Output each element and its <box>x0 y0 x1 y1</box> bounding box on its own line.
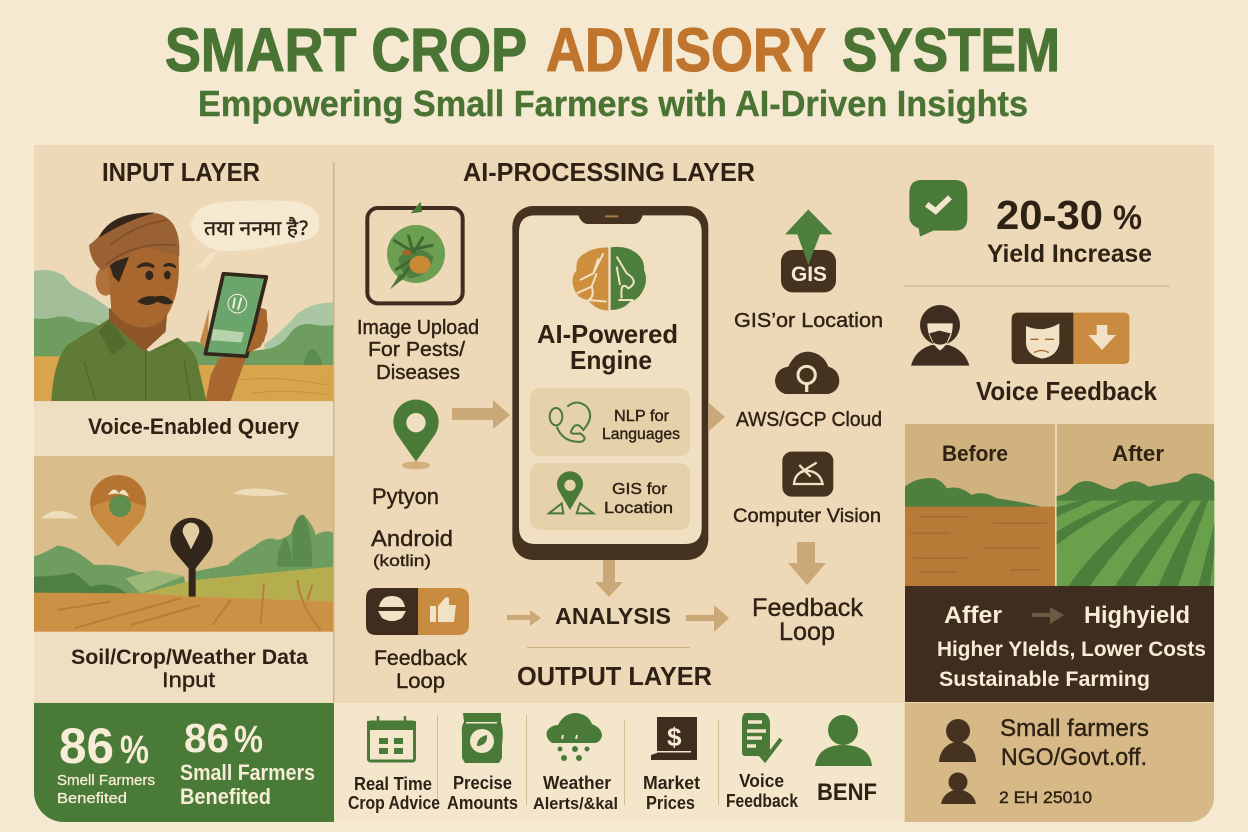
speech bubble <box>191 200 319 251</box>
label: python: Pytyon <box>372 484 439 509</box>
label: feedback loop right: Loop <box>779 618 835 646</box>
arrow: right toward engine <box>452 400 510 429</box>
icon: GIS <box>781 209 836 292</box>
label: image upload: Diseases <box>376 362 460 384</box>
card: NLP: NLP for <box>614 408 670 425</box>
label: computer vision: Computer Vision <box>733 506 881 527</box>
output: precise amounts: Amounts <box>447 793 518 813</box>
output: real time crop advice: Real Time <box>354 774 432 794</box>
stat left: % <box>120 728 149 772</box>
phone: AI-powered engine <box>512 206 708 560</box>
shirt <box>51 319 206 401</box>
label: feedback loop right <box>752 594 863 646</box>
stat right: Benefited <box>180 784 271 809</box>
output: weather alerts: Alerts/&kal <box>533 794 618 813</box>
output: market prices <box>643 717 700 813</box>
icon: cloud <box>775 352 839 394</box>
subtitle: Empowering Small Farmers with AI-Driven Insights <box>198 83 1028 124</box>
label: analysis: ANALYSIS <box>555 603 671 629</box>
card: NLP: Languages <box>602 426 680 443</box>
title: ADVISORY <box>546 16 826 84</box>
stat right: % <box>234 719 263 761</box>
panel: results: Affer <box>944 602 1002 629</box>
panel: results <box>905 586 1214 702</box>
icon: person two <box>941 772 976 804</box>
title <box>165 16 1060 84</box>
label: soil crop weather input: Soil/Crop/Weather Data <box>71 646 308 669</box>
output: voice feedback: Voice <box>739 771 784 791</box>
output: beneficiaries <box>815 715 877 806</box>
stat left: Smell Farmers <box>57 772 155 789</box>
label: small farmers: Small farmers <box>1000 715 1149 742</box>
output: real time crop advice: Crop Advice <box>348 793 440 813</box>
card: GIS: Location <box>604 500 673 517</box>
main panel background <box>34 145 1214 822</box>
icon: face and down arrow <box>1012 313 1129 364</box>
label: image upload <box>357 317 479 384</box>
arrow: after to high yield <box>1032 607 1064 624</box>
label: image upload: For Pests/ <box>368 339 465 361</box>
band: voice query <box>34 402 334 456</box>
label: feedback loop left: Feedback <box>374 647 467 670</box>
output: real time crop advice <box>348 716 440 813</box>
stat: yield increase: Yield Increase <box>987 240 1152 268</box>
title: SMART CROP <box>165 16 527 84</box>
face and neck <box>109 308 167 352</box>
label: GIS location: GIS’or Location <box>734 310 883 332</box>
panel: results: Sustainable Farming <box>939 668 1150 691</box>
panel: impact column <box>904 180 1214 822</box>
panel: results: Highyield <box>1084 602 1190 629</box>
label: feedback loop left <box>374 647 467 693</box>
speech bubble text: तया ननमा है? <box>204 215 309 244</box>
label: NGO govt: NGO/Govt.off. <box>1001 744 1147 771</box>
stat left: Benefited <box>57 790 127 807</box>
illustration: field with map pins <box>34 456 334 632</box>
card: GIS <box>530 463 690 530</box>
dark pin <box>170 518 213 597</box>
icon: computer vision <box>782 452 833 497</box>
output: precise amounts <box>447 713 518 813</box>
icon: person with mask <box>911 305 969 366</box>
label: soil crop weather input: Input <box>162 669 215 692</box>
stat right: 86 <box>184 715 229 761</box>
arrow: down to analysis <box>595 560 623 597</box>
stat: yield increase <box>987 192 1152 268</box>
output: weather alerts <box>533 713 618 813</box>
label: AI-powered engine: AI-Powered <box>537 319 678 349</box>
hand and arm <box>206 308 267 401</box>
label: AI-powered engine <box>537 319 678 375</box>
arrow: to analysis <box>507 610 541 626</box>
arrow: down to feedback <box>788 542 826 585</box>
icon text: GIS: GIS <box>791 263 827 286</box>
output: weather alerts: Weather <box>543 773 611 793</box>
icon: check speech bubble <box>909 180 967 237</box>
card: NLP <box>530 388 690 456</box>
output: market prices: $ <box>667 722 682 752</box>
output: voice feedback: Feedback <box>726 791 799 811</box>
illustration: farmer with phone <box>34 200 334 401</box>
label: cloud: AWS/GCP Cloud <box>736 409 882 431</box>
panel: before <box>905 424 1055 586</box>
label: code: 2 EH 25010 <box>999 788 1092 807</box>
heading: output layer: OUTPUT LAYER <box>517 661 712 691</box>
label: voice feedback: Voice Feedback <box>976 376 1157 406</box>
panel: input layer <box>34 157 334 822</box>
output: market prices: Prices <box>646 793 695 813</box>
label: android kotlin <box>371 526 453 570</box>
heading: AI processing layer: AI-PROCESSING LAYER <box>463 157 755 187</box>
icon: feedback thumbs up <box>366 588 469 635</box>
label: soil crop weather input <box>71 646 308 692</box>
output: market prices: Market <box>643 773 700 793</box>
orange pin <box>90 475 146 547</box>
band: soil crop weather <box>34 632 334 702</box>
label: feedback loop left: Loop <box>396 670 445 693</box>
label: android kotlin: Android <box>371 526 453 551</box>
stat left <box>57 718 155 807</box>
arrow: analysis to feedback <box>686 605 729 632</box>
icon: location pin <box>393 399 439 469</box>
panel: AI processing layer <box>357 157 883 693</box>
panel: beneficiaries <box>905 703 1214 822</box>
phone <box>205 274 266 356</box>
label: AI-powered engine: Engine <box>570 345 652 375</box>
stat left: 86 <box>59 718 114 774</box>
label: image upload: Image Upload <box>357 317 479 339</box>
icon: brain <box>572 247 646 311</box>
panel: results: Higher YIelds, Lower Costs <box>937 638 1206 661</box>
heading: input layer: INPUT LAYER <box>102 157 260 187</box>
label: feedback loop right: Feedback <box>752 594 863 622</box>
icon: image upload pest <box>367 202 463 303</box>
stat: yield increase: 20-30 <box>996 192 1103 238</box>
output: beneficiaries: BENF <box>817 779 877 806</box>
panel: before: Before <box>942 441 1008 466</box>
stat: yield increase: % <box>1113 199 1142 237</box>
label: voice query: Voice-Enabled Query <box>88 414 300 439</box>
stat right <box>180 715 315 809</box>
title: SYSTEM <box>842 16 1060 84</box>
card: GIS: GIS for <box>612 481 668 498</box>
panel: output strip <box>334 703 904 822</box>
stat right: Small Farmers <box>180 760 315 785</box>
turban <box>89 213 179 271</box>
stat block: farmers benefited <box>34 703 334 822</box>
icon: person one <box>939 719 976 762</box>
output: voice feedback <box>726 713 799 811</box>
panel: after: After <box>1112 441 1164 466</box>
panel: after <box>1057 424 1214 586</box>
arrow: engine to services <box>709 403 725 431</box>
label: android kotlin: (kotlin) <box>373 553 431 570</box>
output: precise amounts: Precise <box>453 773 512 793</box>
